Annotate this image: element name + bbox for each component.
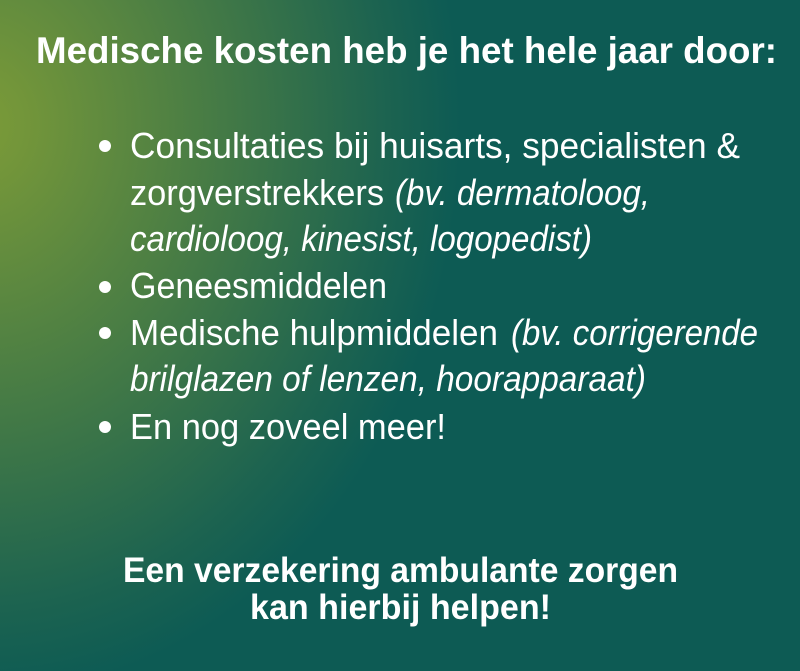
bullet 3: Medische hulpmiddelen [130, 312, 498, 353]
bullet 1: cardioloog, kinesist, logopedist) [130, 218, 592, 259]
bullet 3 [99, 312, 758, 399]
bullet 1: Consultaties bij huisarts, specialisten & [130, 125, 740, 166]
bullet 1: zorgverstrekkers [130, 172, 384, 213]
bullet 3: (bv. corrigerende [511, 312, 758, 353]
closing message: Een verzekering ambulante zorgen [123, 551, 678, 590]
bullet 3: brilglazen of lenzen, hoorapparaat) [130, 358, 646, 399]
bullet 1 [99, 125, 740, 259]
bullet 4: En nog zoveel meer! [130, 406, 446, 447]
closing message: kan hierbij helpen! [250, 588, 551, 627]
bullet 1: (bv. dermatoloog, [395, 172, 650, 213]
bullet list [99, 125, 758, 447]
closing message [123, 551, 678, 627]
bullet 2: Geneesmiddelen [130, 265, 387, 306]
title: Medische kosten heb je het hele jaar door: [36, 30, 777, 71]
